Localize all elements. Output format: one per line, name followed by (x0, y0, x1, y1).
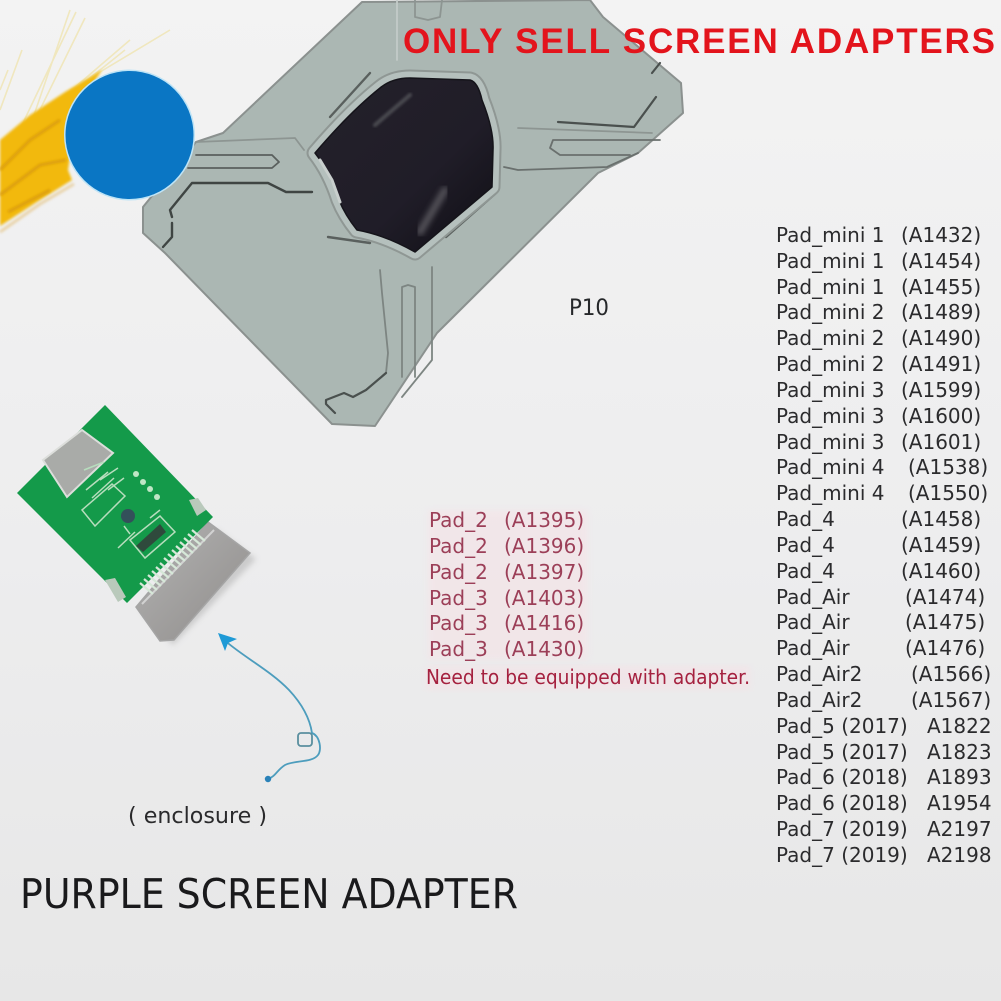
case body (143, 0, 683, 426)
panel: compatible model list: Pad_Air (776, 585, 850, 609)
heading: only sell screen adapters: ONLY SELL SCREEN ADAPTERS (403, 22, 995, 61)
wheat ear decoration (0, 10, 170, 232)
red model rows: Pad_2 (429, 534, 488, 558)
panel: compatible model list: Pad_Air (776, 610, 850, 634)
panel: compatible model list: A1893 (927, 765, 992, 789)
panel: compatible model list: (A1458) (901, 507, 981, 531)
panel: compatible model list: Pad_Air2 (776, 662, 862, 686)
pink text halo (428, 510, 588, 660)
blue circle (64, 70, 195, 200)
panel: compatible model list: Pad_mini 4 (776, 481, 884, 505)
panel: compatible model list: Pad_mini 3 (776, 404, 884, 428)
panel: compatible model list: (A1600) (901, 404, 981, 428)
curved arrow line (222, 638, 320, 779)
panel: compatible model list: (A1455) (901, 275, 981, 299)
panel: red compatibility list (426, 508, 750, 690)
green circuit board (17, 405, 213, 603)
label: P10: P10 (569, 296, 609, 321)
panel: compatible model list: Pad_mini 2 (776, 352, 884, 376)
panel: compatible model list: (A1550) (908, 481, 988, 505)
case grooves (163, 0, 660, 413)
red model rows: Pad_2 (429, 560, 488, 584)
panel: compatible model list: (A1474) (905, 585, 985, 609)
red model rows: Pad_2 (429, 508, 488, 532)
red model rows: Pad_3 (429, 611, 488, 635)
red model rows: Pad_3 (429, 637, 488, 661)
panel: compatible model list: (A1454) (901, 249, 981, 273)
arrow (218, 633, 320, 782)
panel: compatible model list: (A1490) (901, 326, 981, 350)
black screen window (315, 78, 493, 252)
panel: compatible model list: Pad_mini 1 (776, 249, 884, 273)
panel: compatible model list: Pad_5 (2017) (776, 714, 908, 738)
panel: compatible model list: Pad_mini 3 (776, 430, 884, 454)
dark components (121, 509, 135, 523)
screen highlights (320, 95, 445, 232)
panel: compatible model list: (A1476) (905, 636, 985, 660)
arrow tail dot (265, 776, 271, 782)
panel: compatible model list: Pad_Air (776, 636, 850, 660)
panel: compatible model list: Pad_5 (2017) (776, 740, 908, 764)
red model rows: (A1395) (504, 508, 584, 532)
solder contact row (140, 530, 205, 594)
board shadow (140, 529, 256, 645)
pink caption halo (426, 666, 750, 690)
screen frame (315, 78, 493, 252)
panel: compatible model list: Pad_4 (776, 507, 835, 531)
panel: compatible model list: (A1601) (901, 430, 981, 454)
panel: compatible model list: (A1459) (901, 533, 981, 557)
corner mounting pads (105, 498, 206, 602)
panel: compatible model list: (A1491) (901, 352, 981, 376)
panel: compatible model list: A1954 (927, 791, 992, 815)
panel: compatible model list: (A1566) (911, 662, 991, 686)
adapter board (17, 405, 256, 645)
red model rows: (A1396) (504, 534, 584, 558)
usb connector (43, 430, 113, 497)
title: purple screen adapter: PURPLE SCREEN ADAPTER (20, 870, 518, 918)
panel: compatible model list: A2197 (927, 817, 992, 841)
panel: compatible model list: Pad_7 (2019) (776, 843, 908, 867)
test pads (133, 471, 160, 500)
panel: compatible model list: Pad_Air2 (776, 688, 862, 712)
panel: compatible model list: Pad_mini 2 (776, 300, 884, 324)
panel: compatible model list: Pad_mini 1 (776, 275, 884, 299)
caption: enclosure: ( enclosure ) (128, 804, 267, 829)
panel: compatible model list: Pad_mini 1 (776, 223, 884, 247)
panel: compatible model list: A2198 (927, 843, 992, 867)
panel: compatible model list: Pad_6 (2018) (776, 791, 908, 815)
panel: compatible model list: Pad_mini 2 (776, 326, 884, 350)
panel: compatible model list: (A1460) (901, 559, 981, 583)
panel: compatible model list: Pad_7 (2019) (776, 817, 908, 841)
screen frame inner band (315, 78, 493, 252)
red model rows: (A1416) (504, 611, 584, 635)
panel: compatible model list: (A1489) (901, 300, 981, 324)
device: P10 grey case (143, 0, 683, 426)
adapter note: Need to be equipped with adapter. (426, 665, 750, 689)
panel: compatible model list: (A1567) (911, 688, 991, 712)
panel: compatible model list: (A1475) (905, 610, 985, 634)
connector edge strip (142, 530, 214, 604)
red model rows (429, 508, 584, 661)
panel: compatible model list: Pad_mini 4 (776, 455, 884, 479)
panel: compatible model list: A1823 (927, 740, 992, 764)
panel: compatible model list: (A1599) (901, 378, 981, 402)
arrow head (218, 633, 237, 651)
red model rows: (A1430) (504, 637, 584, 661)
panel: compatible model list: Pad_mini 3 (776, 378, 884, 402)
panel: compatible model list: A1822 (927, 714, 992, 738)
panel: compatible model list: Pad_4 (776, 559, 835, 583)
small loop box (298, 733, 312, 746)
metal dock connector (136, 522, 250, 641)
panel: compatible model list: (A1538) (908, 455, 988, 479)
red model rows: (A1403) (504, 586, 584, 610)
panel: compatible model list: Pad_6 (2018) (776, 765, 908, 789)
panel: compatible model list: Pad_4 (776, 533, 835, 557)
red model rows: Pad_3 (429, 586, 488, 610)
panel: compatible model list: (A1432) (901, 223, 981, 247)
panel: compatible model list (776, 223, 992, 867)
red model rows: (A1397) (504, 560, 584, 584)
circuit components (82, 462, 175, 558)
